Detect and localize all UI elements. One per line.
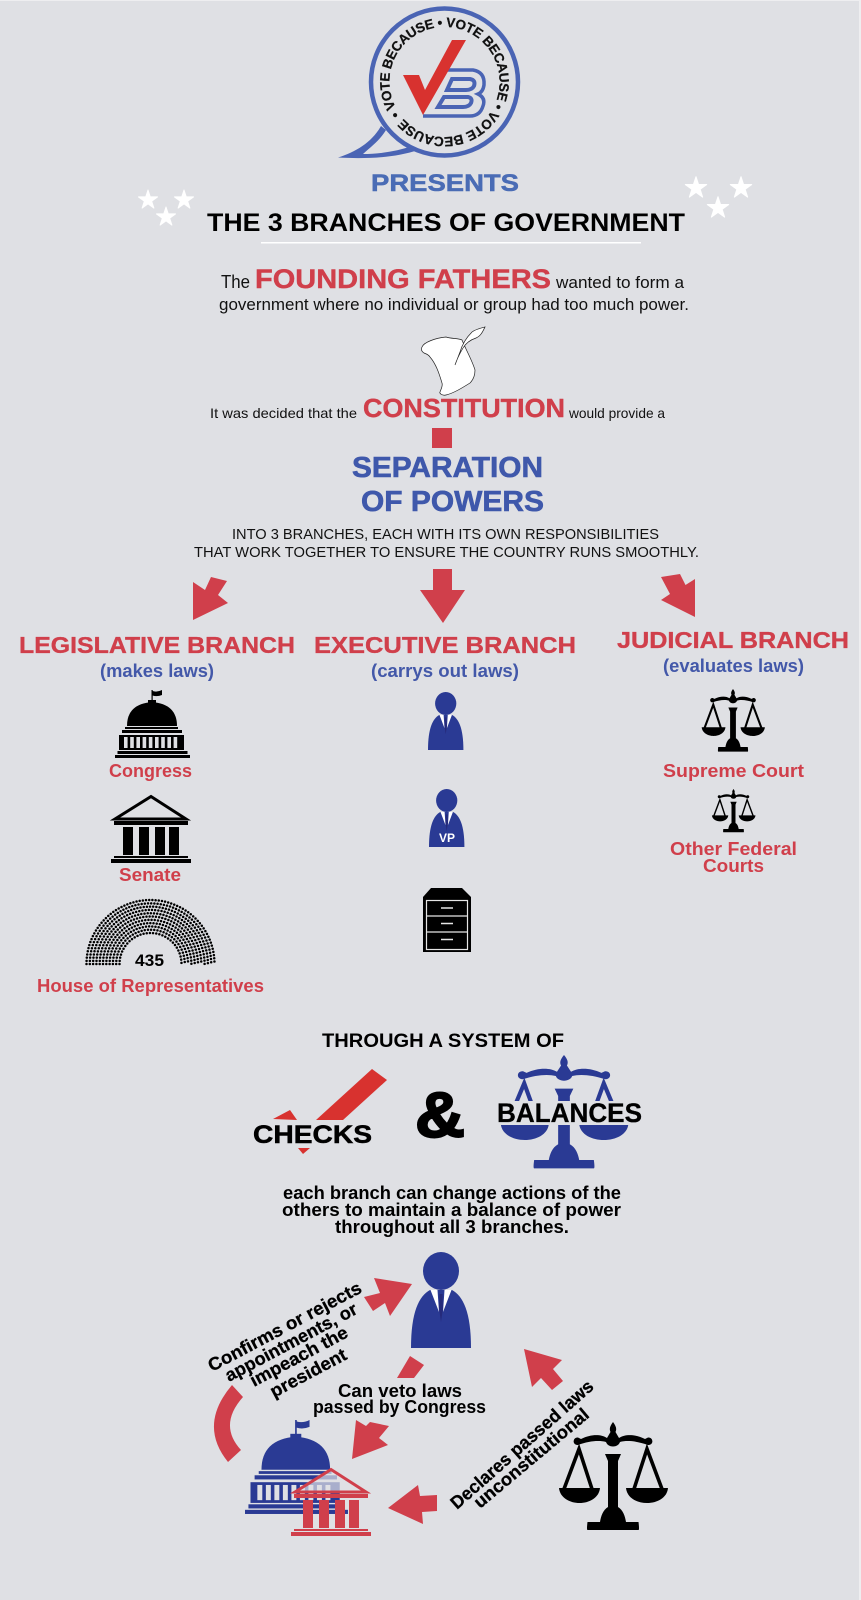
stars left xyxy=(138,190,194,225)
arrow: to judicial xyxy=(661,574,695,617)
arrow: to legislative xyxy=(193,577,228,620)
text block: founding fathers: wanted to form a xyxy=(555,273,685,292)
text block: constitution xyxy=(210,395,665,423)
text block: each branch xyxy=(282,1183,621,1237)
heading: separation of powers: SEPARATION xyxy=(352,452,543,484)
stars right xyxy=(685,177,752,217)
icon: scale large xyxy=(559,1422,668,1530)
label: other federal courts: Courts xyxy=(703,856,764,876)
text: can veto laws: passed by Congress xyxy=(313,1397,486,1417)
text block: each branch: others to maintain a balance of power xyxy=(282,1200,621,1220)
heading: presents: PRESENTS xyxy=(371,170,519,197)
icon: capitol blue xyxy=(245,1420,348,1514)
diagram: checks and balances cycle xyxy=(204,1252,668,1536)
text block: into 3 branches: INTO 3 BRANCHES, EACH WITH ITS OWN RESPONSIBILITIES xyxy=(232,526,659,543)
heading: executive: EXECUTIVE BRANCH xyxy=(314,632,576,658)
icon: vice president xyxy=(429,789,464,847)
heading: separation of powers: OF POWERS xyxy=(361,486,544,518)
label: senate: Senate xyxy=(119,865,181,885)
arrow: curved senate stem xyxy=(214,1385,243,1462)
heading: through a system of: THROUGH A SYSTEM OF xyxy=(322,1031,564,1052)
panel: judicial branch xyxy=(617,627,849,876)
title: THE 3 BRANCHES OF GOVERNMENT xyxy=(207,209,685,237)
balances wordmark xyxy=(495,1055,645,1168)
text block: founding fathers xyxy=(219,264,689,314)
subheading: evaluates laws: (evaluates laws) xyxy=(663,656,804,676)
text block: each branch: each branch can change actions of the xyxy=(283,1183,621,1203)
icon: supreme court scale xyxy=(702,689,765,752)
text: confirms or rejects: president xyxy=(266,1344,350,1402)
text: declares passed laws: unconstitutional xyxy=(470,1404,593,1512)
label: other federal courts xyxy=(670,839,797,876)
text: confirms or rejects: impeach the xyxy=(246,1322,351,1391)
number: 435: 435 xyxy=(135,951,164,970)
text block: founding fathers: government where no individual or group had too much power. xyxy=(219,295,689,314)
checks wordmark: CHECKS xyxy=(253,1121,372,1149)
label: house of representatives: House of Representatives xyxy=(37,976,264,996)
icon: vice president: VP xyxy=(439,833,455,845)
arrow stem: veto xyxy=(397,1356,424,1378)
icon: senate xyxy=(111,796,191,863)
label: other federal courts: Other Federal xyxy=(670,839,797,859)
logo: Vote Because speech bubble xyxy=(338,6,520,158)
icon: president large xyxy=(411,1252,471,1348)
arrow: to executive xyxy=(420,569,465,623)
heading: separation of powers xyxy=(352,452,544,518)
panel: legislative branch xyxy=(19,632,295,996)
label: supreme court: Supreme Court xyxy=(663,761,804,781)
text block: founding fathers: FOUNDING FATHERS xyxy=(255,264,551,294)
balances wordmark: BALANCES xyxy=(497,1098,642,1128)
text: declares passed laws: Declares passed laws xyxy=(446,1376,597,1513)
text: confirms or rejects: Confirms or rejects xyxy=(204,1278,365,1376)
arrow: judicial to congress xyxy=(388,1485,437,1524)
logo: Vote Because speech bubble: • VOTE BECAUSE • VOTE BECAUSE • VOTE BECAUSE xyxy=(380,17,510,147)
arrow: senate to president xyxy=(364,1278,412,1316)
icon: congress xyxy=(115,690,190,758)
panel: executive branch xyxy=(314,632,576,952)
label: congress: Congress xyxy=(109,761,192,781)
subheading: carrys out laws: (carrys out laws) xyxy=(371,661,519,681)
icon: house seats xyxy=(86,900,214,964)
heading: legislative: LEGISLATIVE BRANCH xyxy=(19,632,295,658)
icon: president xyxy=(428,692,463,750)
text: can veto laws: Can veto laws xyxy=(338,1381,462,1401)
text block: constitution: would provide a xyxy=(568,405,665,421)
text: can veto laws xyxy=(313,1381,486,1417)
connector square xyxy=(432,428,452,448)
icon: senate red xyxy=(291,1469,371,1536)
text block: into 3 branches: THAT WORK TOGETHER TO ENSURE THE COUNTRY RUNS SMOOTHLY. xyxy=(194,544,699,561)
text block: founding fathers: The xyxy=(221,272,250,292)
icon: constitution scroll and quill xyxy=(421,327,485,395)
arrow: veto to congress xyxy=(352,1420,389,1459)
arrow: judicial to president xyxy=(524,1349,563,1390)
text block: constitution: It was decided that the xyxy=(210,405,357,421)
icon: cabinet xyxy=(423,888,471,952)
icon: federal courts scale xyxy=(712,789,756,832)
text: confirms or rejects: appointments, or xyxy=(221,1299,361,1386)
text block: into 3 branches xyxy=(194,526,699,561)
subheading: makes laws: (makes laws) xyxy=(100,661,214,681)
checks wordmark xyxy=(253,1069,387,1154)
text block: constitution: CONSTITUTION xyxy=(363,395,565,423)
text block: each branch: throughout all 3 branches. xyxy=(335,1217,569,1237)
ampersand: & xyxy=(415,1079,465,1151)
heading: judicial: JUDICIAL BRANCH xyxy=(617,627,849,653)
